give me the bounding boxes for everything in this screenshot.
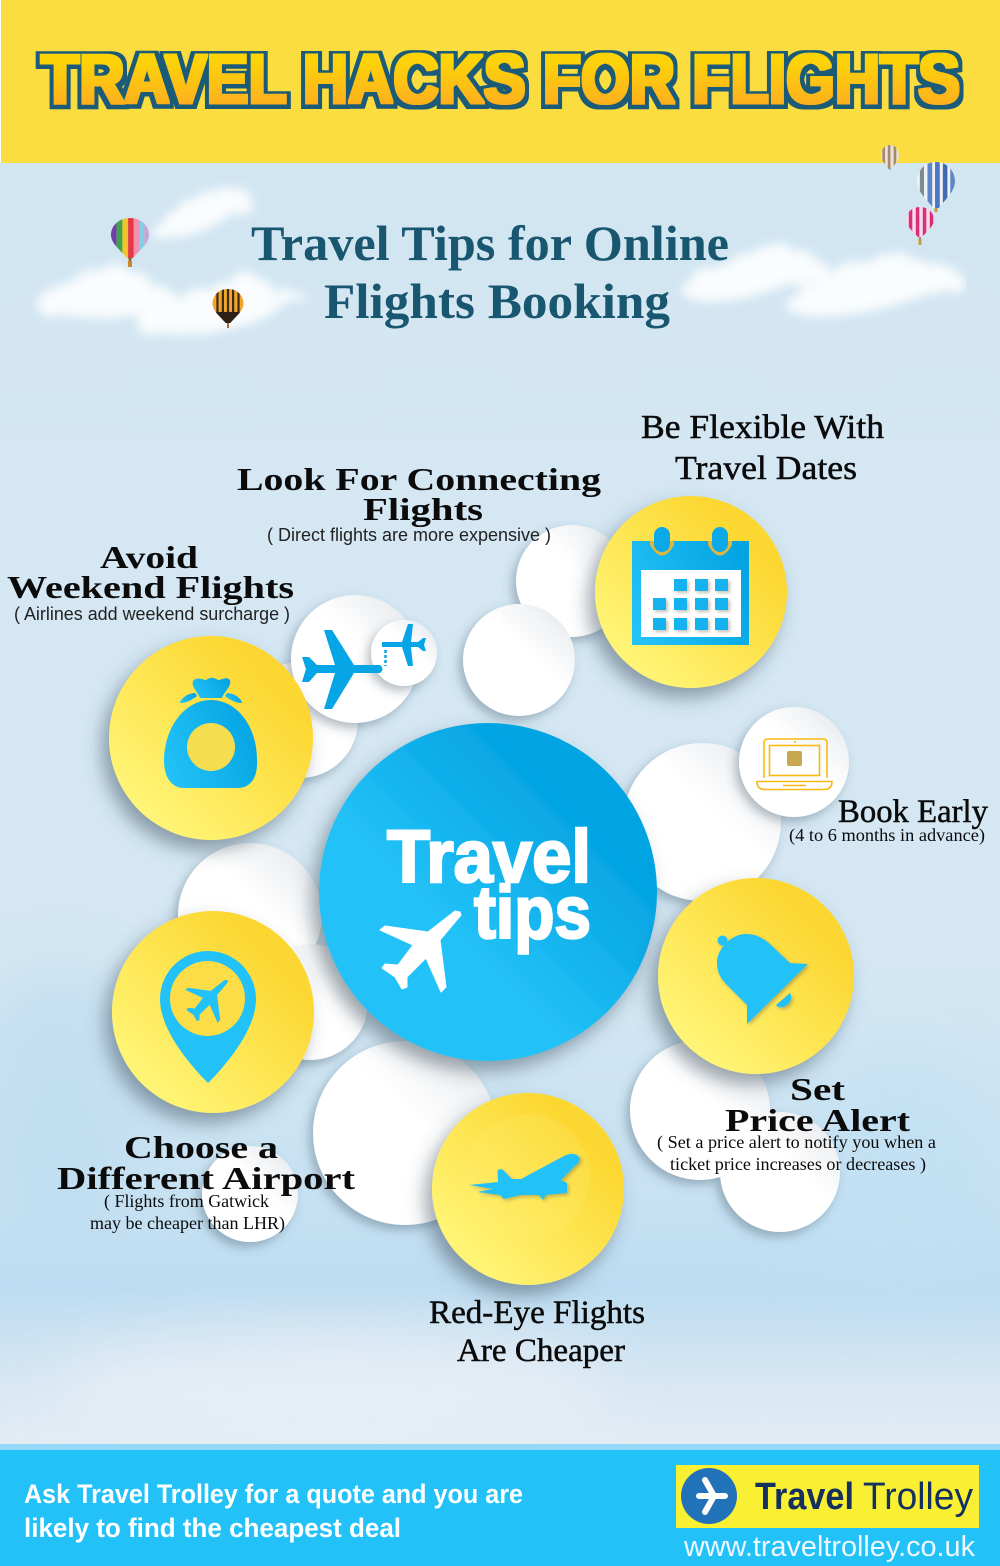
icon: connecting flights (291, 595, 437, 723)
logo (676, 1465, 979, 1528)
label: red-eye flights: Are Cheaper (457, 1333, 625, 1369)
white backing circles (178, 525, 840, 1242)
panel: airport pin (112, 911, 314, 1113)
icon: white plane (380, 911, 461, 992)
label: weekend flights: ( Airlines add weekend surcharge ) (14, 604, 290, 624)
subtitle: Flights Booking (324, 273, 670, 329)
panel: bag (109, 636, 313, 840)
icon: money bag (164, 678, 257, 788)
panel: laptop (739, 707, 849, 817)
label: price alert: Set (790, 1071, 845, 1107)
icon: airliner (469, 1154, 580, 1200)
label: red-eye flights (429, 1295, 645, 1369)
label: price alert: ticket price increases or decreases ) (670, 1154, 926, 1175)
label: connecting flights: Look For Connecting (237, 461, 601, 497)
website url: www.traveltrolley.co.uk (683, 1531, 975, 1563)
logo wordmark (755, 1476, 973, 1518)
label: price alert: Price Alert (725, 1102, 910, 1138)
label: flexible dates: Be Flexible With (641, 409, 884, 446)
icon: calendar (632, 527, 749, 645)
logo wordmark: Trolley (863, 1476, 973, 1518)
central circle (319, 723, 657, 1061)
label: book early: (4 to 6 months in advance) (789, 825, 985, 846)
icon: logo plane (699, 1480, 725, 1512)
subtitle (251, 215, 729, 329)
icon: pin plane (185, 980, 228, 1023)
label: weekend flights: Avoid (100, 539, 198, 575)
logo wordmark: Travel (755, 1476, 854, 1518)
label: book early (789, 794, 988, 846)
icon: laptop (757, 739, 832, 790)
label: different airport: ( Flights from Gatwick (104, 1191, 269, 1212)
label: flexible dates (641, 409, 884, 487)
central heading (387, 815, 591, 954)
clouds (38, 181, 965, 342)
label: different airport (57, 1129, 355, 1234)
label: different airport: Choose a (124, 1129, 278, 1165)
footer band (0, 1444, 1000, 1566)
balloon: blue (917, 162, 955, 212)
balloon: tan (881, 145, 899, 170)
label: different airport: Different Airport (57, 1160, 355, 1196)
label: red-eye flights: Red-Eye Flights (429, 1295, 645, 1331)
header band (1, 0, 1000, 163)
central heading: tips (474, 871, 591, 954)
balloon: pink (906, 207, 934, 245)
label: weekend flights (7, 539, 294, 624)
label: connecting flights (237, 461, 601, 545)
footer text (24, 1479, 523, 1543)
label: connecting flights: ( Direct flights are more expensive ) (267, 525, 551, 545)
label: flexible dates: Travel Dates (675, 450, 857, 487)
panel: red-eye (432, 1093, 624, 1285)
footer text: likely to find the cheapest deal (24, 1513, 401, 1543)
icon: bell (717, 934, 808, 1024)
label: connecting flights: Flights (363, 491, 483, 527)
balloon: rainbow (111, 218, 149, 267)
panel: calendar (595, 496, 787, 688)
subtitle: Travel Tips for Online (251, 215, 729, 271)
footer text: Ask Travel Trolley for a quote and you are (24, 1479, 523, 1509)
panel: bell (658, 878, 854, 1074)
label: book early: Book Early (838, 794, 988, 830)
label: weekend flights: Weekend Flights (7, 569, 294, 605)
label: price alert (657, 1071, 936, 1175)
central heading: Travel (387, 815, 591, 898)
icon: map pin (160, 951, 256, 1083)
label: price alert: ( Set a price alert to notify you when a (657, 1132, 936, 1153)
balloon: dark yellow (212, 289, 244, 328)
label: different airport: may be cheaper than LHR) (90, 1213, 285, 1234)
